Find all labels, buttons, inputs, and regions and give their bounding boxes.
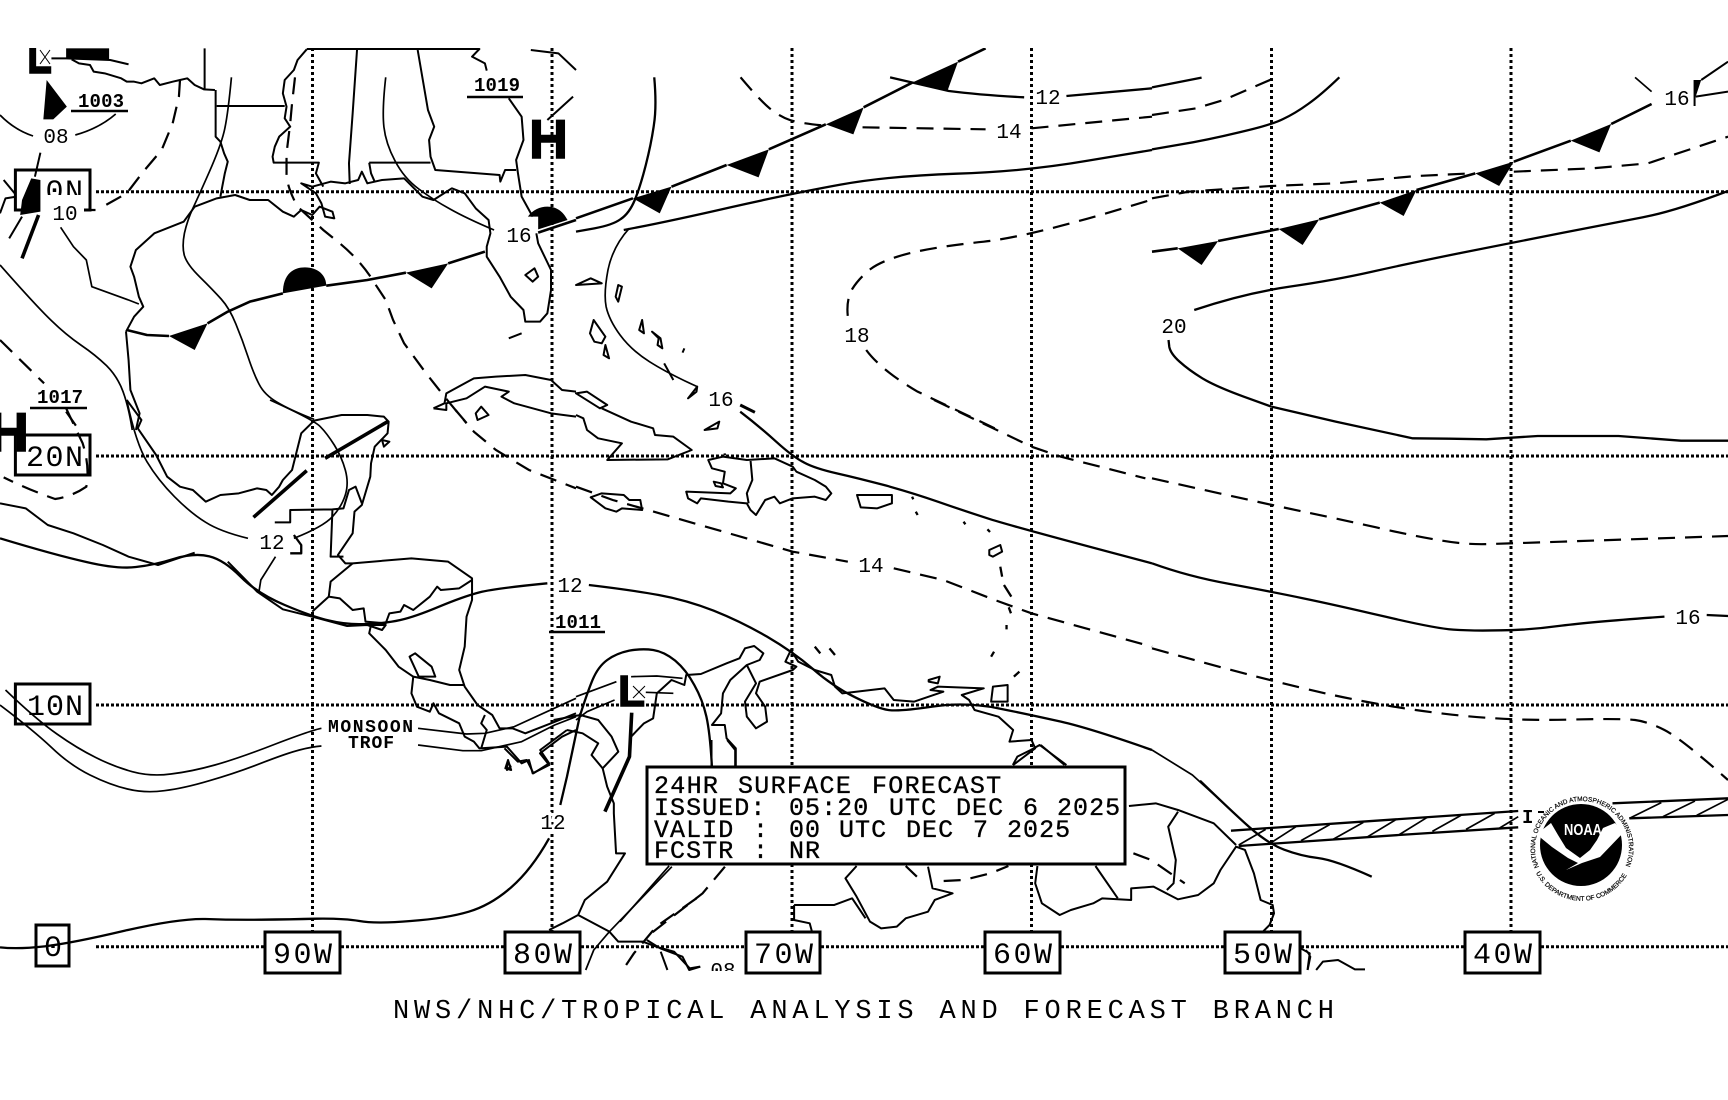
latitude label 10N xyxy=(15,684,90,725)
forecast info box: FCSTR xyxy=(654,837,734,866)
monsoon trough label xyxy=(328,718,413,754)
value 16 east: 16 xyxy=(1675,608,1701,631)
coast: United States and Gulf of Mexico xyxy=(72,48,576,430)
front fragment: north-east corner xyxy=(1695,62,1728,106)
value 08 clipped at chart edge: 08 xyxy=(710,961,736,984)
monsoon trough label: TROF xyxy=(348,734,394,754)
coast: Mexico and Central America xyxy=(0,400,576,773)
forecast info box: VALID xyxy=(654,816,734,845)
longitude label 60W xyxy=(985,932,1060,973)
forecast info box: 05:20 xyxy=(789,794,869,823)
tropical wave axis marker xyxy=(1522,807,1544,829)
chart top clip xyxy=(0,0,1728,48)
forecast info box: : xyxy=(753,816,769,845)
warm front semicircle near Florida xyxy=(528,207,576,233)
low symbol Colombia: L xyxy=(618,667,645,716)
value 16 northeast: 16 xyxy=(1664,89,1690,112)
forecast info box: 24HR xyxy=(654,772,719,801)
latitude label 30N: 30N xyxy=(26,176,83,210)
longitude label 70W xyxy=(746,932,820,973)
forecast info box: 7 xyxy=(973,816,989,845)
forecast info box: 6 xyxy=(1023,794,1039,823)
forecast info box: 2025 xyxy=(1007,816,1071,845)
low symbol top left: L xyxy=(27,23,52,85)
monsoon trough label: MONSOON xyxy=(328,718,413,738)
chart bottom clip xyxy=(695,971,744,991)
value 14 Caribbean: 14 xyxy=(858,556,884,579)
forecast info box xyxy=(647,767,1125,866)
value 12 Yucatan: 12 xyxy=(259,533,285,556)
hatched tropical wave band xyxy=(1231,798,1728,846)
forecast info box: FORECAST xyxy=(872,772,1002,801)
value 08: 08 xyxy=(43,127,69,150)
latitude label 10N: 10N xyxy=(27,691,83,725)
coast: north-east Brazil fragment xyxy=(1316,960,1365,970)
pressure centre 1011: 1011 xyxy=(555,612,601,634)
longitude label 80W xyxy=(505,932,580,973)
longitude label 80W: 80W xyxy=(513,939,572,973)
cold front: eastern Atlantic xyxy=(1152,104,1652,265)
NOAA wordmark: NOAA xyxy=(1564,822,1602,839)
longitude label 90W: 90W xyxy=(273,939,332,973)
value 14 north Atlantic: 14 xyxy=(996,122,1022,145)
contour values xyxy=(43,88,1701,984)
isobars: Atlantic south section xyxy=(576,400,1152,767)
latitude label 20N: 20N xyxy=(26,442,83,476)
coast: South America xyxy=(631,646,1065,767)
coast: Colombia and Ecuador xyxy=(504,715,700,970)
latitude label 30N xyxy=(15,170,90,229)
pressure centre 1003: 1003 xyxy=(78,91,124,113)
isobars: far east section xyxy=(1152,407,1728,800)
pressure centre 1019: 1019 xyxy=(474,75,520,97)
warm front semicircle over the Gulf xyxy=(283,267,326,293)
forecast info box: 2025 xyxy=(1057,794,1121,823)
value 12 Pacific: 12 xyxy=(540,813,566,836)
forecast info box: DEC xyxy=(956,794,1004,823)
coast: Venezuela, Guyana and Brazil xyxy=(647,740,1310,970)
forecast info box: UTC xyxy=(889,794,937,823)
gull swoosh xyxy=(1538,823,1624,870)
isobars: South America section xyxy=(620,853,1185,937)
longitude label 70W: 70W xyxy=(754,939,813,973)
coast: Greater and Lesser Antilles xyxy=(576,405,1019,677)
longitude label 40W: 40W xyxy=(1473,939,1532,973)
pressure centre 1017: 1017 xyxy=(37,387,83,409)
isobars: central section xyxy=(576,77,1152,428)
forecast info box: NR xyxy=(789,837,821,866)
forecast info box: DEC xyxy=(906,816,954,845)
surface trough: Colombia xyxy=(605,713,632,812)
value 12 Caribbean: 12 xyxy=(557,576,583,599)
isobars: west section xyxy=(0,77,494,430)
front fragments: western edge near Texas xyxy=(0,48,129,258)
isobars: southern section xyxy=(0,713,696,970)
forecast info box: : xyxy=(753,837,769,866)
monsoon trough double line: west xyxy=(0,690,576,792)
logo ring text: NATIONAL OCEANIC AND ATMOSPHERIC ADMINISTRATION xyxy=(1530,796,1634,868)
coastlines and political borders xyxy=(0,48,1365,970)
longitude label 50W xyxy=(1225,932,1300,973)
value 16 Florida: 16 xyxy=(506,226,532,249)
latitude label 20N xyxy=(15,435,90,476)
latitude label 0: 0 xyxy=(44,932,62,966)
longitude label 50W: 50W xyxy=(1233,939,1292,973)
NOAA logo xyxy=(1530,796,1634,901)
forecast info box: ISSUED: xyxy=(654,794,766,823)
isobars: equatorial east section xyxy=(1200,781,1372,970)
value 20: 20 xyxy=(1161,317,1187,340)
latitude label 0 xyxy=(36,925,69,966)
value 10: 10 xyxy=(52,204,78,227)
footer credit: NWS/NHC/TROPICAL ANALYSIS AND FORECAST BRANCH xyxy=(393,997,1334,1027)
cold front: Florida to central Atlantic xyxy=(576,48,986,218)
forecast info box: UTC xyxy=(839,816,887,845)
longitude label 60W: 60W xyxy=(993,939,1052,973)
monsoon trough double line: east to low xyxy=(576,676,683,720)
cold front: Gulf of Mexico to Florida xyxy=(127,252,485,350)
longitude label 90W xyxy=(265,932,340,973)
longitude label 40W xyxy=(1465,932,1540,973)
high symbol over Georgia: H xyxy=(529,108,568,170)
logo ring text xyxy=(1530,796,1634,901)
forecast info box: 00 xyxy=(789,816,821,845)
logo ring text: U.S. DEPARTMENT OF COMMERCE xyxy=(1536,871,1627,901)
value 16 Bahamas: 16 xyxy=(708,390,734,413)
isobars: Caribbean and Central America section xyxy=(0,400,576,624)
isobars: east section xyxy=(1152,77,1728,407)
tropical wave axis marker: I xyxy=(1522,807,1533,829)
value 12 north Atlantic: 12 xyxy=(1035,88,1061,111)
surface trough: Yucatan xyxy=(253,422,388,517)
coast: Bahamas xyxy=(576,278,697,408)
latitude and longitude dotted grid xyxy=(96,48,1728,947)
forecast info box: SURFACE xyxy=(738,772,852,801)
value 18: 18 xyxy=(844,326,870,349)
